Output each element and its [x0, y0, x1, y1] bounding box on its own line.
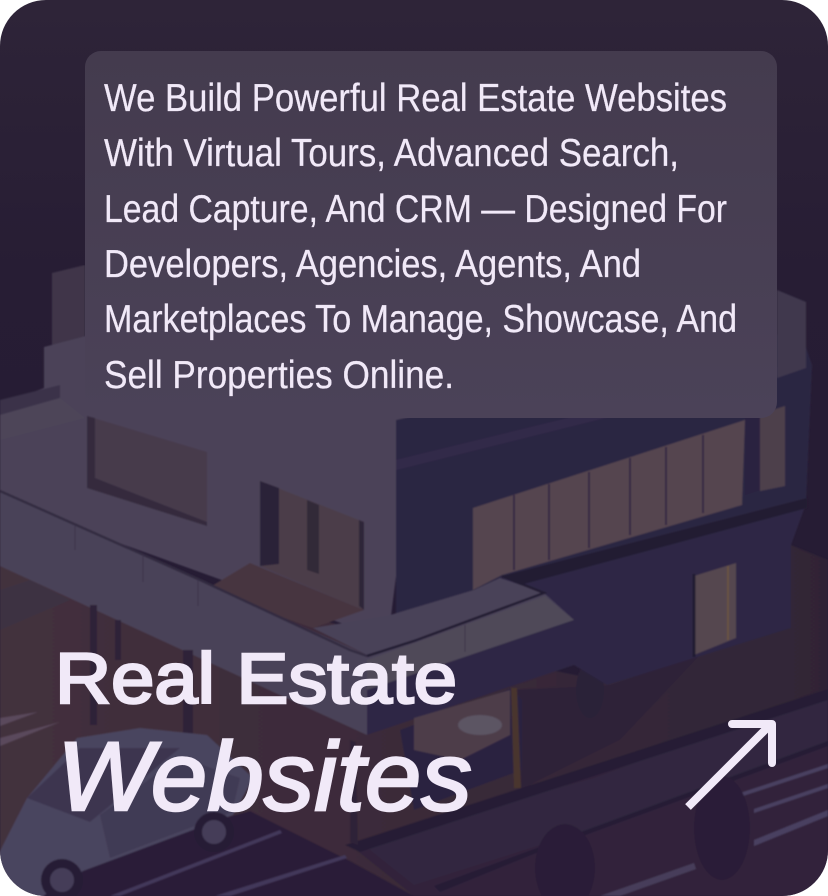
- description text: Developers, Agencies, Agents, And: [104, 243, 641, 286]
- terrace slab front: [367, 620, 574, 735]
- description text: Sell Properties Online.: [104, 354, 454, 397]
- left slab and railing: [0, 491, 400, 735]
- description panel: [85, 51, 777, 418]
- description text: Lead Capture, And CRM — Designed For: [104, 188, 727, 231]
- title: Websites: [57, 722, 472, 831]
- car: [0, 728, 253, 896]
- description text: Marketplaces To Manage, Showcase, And: [104, 298, 737, 341]
- road: [0, 689, 828, 896]
- icon: arrow: [688, 724, 772, 807]
- description text: [104, 77, 737, 397]
- upper right block: [396, 290, 812, 620]
- parking bay lines at left: [0, 712, 60, 746]
- balcony floor: [205, 563, 364, 628]
- description text: We Build Powerful Real Estate Websites: [104, 77, 727, 120]
- title: Real Estate: [55, 640, 457, 719]
- ground floor interior: [400, 688, 522, 810]
- upper windows: [473, 420, 745, 590]
- pillars under slab: [90, 605, 358, 845]
- left wing facade and parapet: [0, 265, 420, 640]
- trees: [540, 670, 744, 845]
- balcony door: [262, 489, 361, 608]
- lower right block and door: [502, 498, 807, 685]
- terrace and glass railing: [313, 576, 574, 690]
- title: [55, 640, 472, 831]
- plaza ground: [0, 540, 828, 896]
- window upper left: [96, 419, 206, 521]
- description text: With Virtual Tours, Advanced Search,: [104, 132, 679, 175]
